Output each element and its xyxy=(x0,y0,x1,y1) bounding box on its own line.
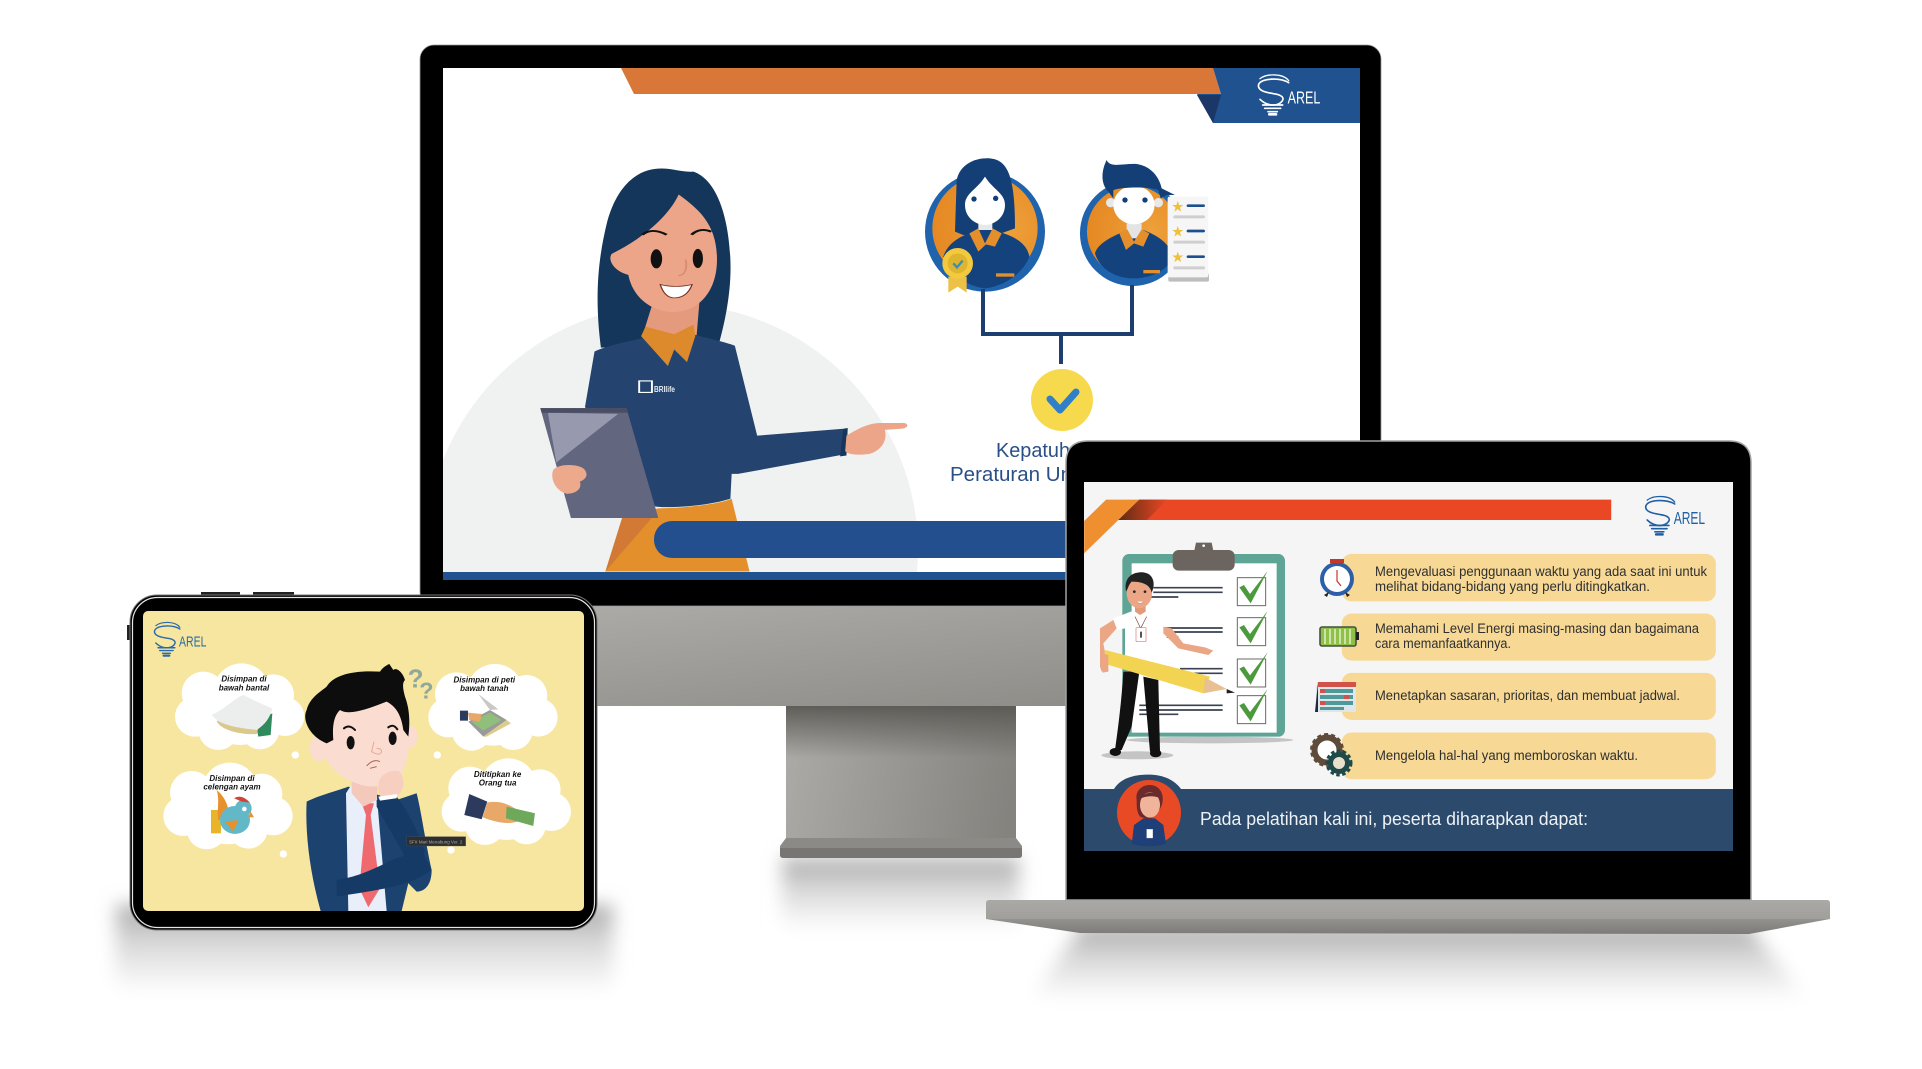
question marks: ? xyxy=(408,663,424,693)
tooltip label: SFX Mari Menabung Ver. 2 xyxy=(409,839,463,845)
cloud captions xyxy=(203,675,522,792)
orange header banner xyxy=(621,68,1221,94)
laptop lid xyxy=(1066,441,1751,900)
skirt xyxy=(605,499,750,572)
pointing hand xyxy=(845,423,907,455)
logo: SAREL blue: AREL xyxy=(1674,508,1705,528)
icon: yellow check badge xyxy=(1031,369,1093,431)
chest brand text: BRIlife xyxy=(654,385,675,394)
panel: laptop screen xyxy=(1084,482,1733,851)
bottom bar text: Pada pelatihan kali ini, peserta diharapkan dapat: xyxy=(1200,809,1588,829)
woman presenter xyxy=(540,169,907,572)
brows xyxy=(642,230,711,235)
cloud captions: Dititipkan ke xyxy=(474,770,522,779)
shadow: laptop xyxy=(1030,926,1808,1000)
collar xyxy=(641,325,695,366)
connector lines xyxy=(983,285,1132,364)
avatar: woman xyxy=(925,158,1045,293)
icon: piggy rooster bank xyxy=(211,790,254,834)
cloud captions: bawah bantal xyxy=(219,683,270,692)
logo: SAREL white xyxy=(1258,75,1320,114)
bullet texts: Menetapkan sasaran, prioritas, dan membuat jadwal. xyxy=(1375,688,1680,703)
panel: tablet screen xyxy=(143,611,584,911)
hair xyxy=(598,169,731,348)
monitor chin xyxy=(420,600,1381,706)
avatar: man with rating card: ★ xyxy=(1171,225,1184,241)
question marks xyxy=(408,669,432,698)
avatar: man with rating card: ★ xyxy=(1171,250,1184,266)
left hand xyxy=(552,465,587,494)
shadow: monitor stand xyxy=(782,858,1019,930)
bottom blue strip xyxy=(443,572,1066,580)
bullet pills xyxy=(1342,554,1716,779)
monitor caption: Peraturan Un xyxy=(950,464,1072,486)
clipboard with checklist xyxy=(1100,543,1293,759)
bullet texts: Memahami Level Energi masing-masing dan bagaimana xyxy=(1375,621,1699,636)
cloud captions: Disimpan di xyxy=(221,675,267,684)
monitor caption: Kepatuh xyxy=(996,440,1070,462)
bullet texts: Mengevaluasi penggunaan waktu yang ada saat ini untuk xyxy=(1375,564,1707,579)
avatar: man with rating card xyxy=(1080,160,1209,286)
icon: hand giving cash xyxy=(464,794,535,826)
bullet texts: Mengelola hal-hal yang memboroskan waktu. xyxy=(1375,748,1638,763)
bullet texts: cara memanfaatkannya. xyxy=(1375,636,1511,651)
bottom bar xyxy=(1084,789,1733,851)
avatar: man with rating card: ★ xyxy=(1171,199,1184,215)
cloud captions: Disimpan di xyxy=(209,774,255,783)
tablet held xyxy=(540,408,658,518)
icon: gears xyxy=(1312,734,1351,775)
thinking man xyxy=(305,664,432,911)
logo: SAREL white: AREL xyxy=(1288,87,1320,107)
tablet side buttons xyxy=(127,592,294,640)
icon: battery xyxy=(1320,627,1359,646)
employee avatars xyxy=(925,158,1209,293)
bullet texts: melihat bidang-bidang yang perlu ditingkatkan. xyxy=(1375,579,1650,594)
face xyxy=(610,195,717,312)
monitor stand neck xyxy=(780,706,1022,858)
cloud captions: Disimpan di peti xyxy=(453,675,516,684)
panel: monitor screen xyxy=(443,68,1360,580)
logo: SAREL blue xyxy=(1646,497,1705,534)
blue corner header xyxy=(1197,68,1360,123)
smile xyxy=(660,284,692,298)
background semicircle xyxy=(443,310,918,572)
laptop header banner xyxy=(1084,500,1611,553)
tablet body xyxy=(130,595,597,930)
eyes xyxy=(651,249,662,268)
cloud captions: Orang tua xyxy=(479,779,517,788)
tooltip label xyxy=(407,837,466,846)
avatar: facilitator xyxy=(1113,775,1182,846)
icon: pillow with cash xyxy=(212,695,272,737)
monitor bezel xyxy=(420,45,1381,606)
nose xyxy=(678,260,686,276)
man with pencil xyxy=(1100,572,1235,759)
body xyxy=(585,334,846,507)
thought clouds xyxy=(163,663,571,858)
chest logo xyxy=(639,381,652,392)
logo: SAREL tablet xyxy=(154,622,206,656)
icon: chest with cash xyxy=(460,694,511,737)
icon: calendar xyxy=(1315,682,1356,712)
bullet texts xyxy=(1375,564,1707,763)
logo: SAREL tablet: AREL xyxy=(179,633,206,650)
question marks: ? xyxy=(419,678,434,704)
cloud captions: celengan ayam xyxy=(203,783,261,792)
cloud captions: bawah tanah xyxy=(460,684,509,693)
icon: alarm clock xyxy=(1320,559,1354,597)
monitor caption xyxy=(952,442,1069,481)
shadow: tablet xyxy=(116,905,613,993)
laptop base xyxy=(986,900,1830,934)
cuff xyxy=(840,428,848,456)
neck xyxy=(644,302,700,336)
blue pill bar xyxy=(654,521,1066,558)
